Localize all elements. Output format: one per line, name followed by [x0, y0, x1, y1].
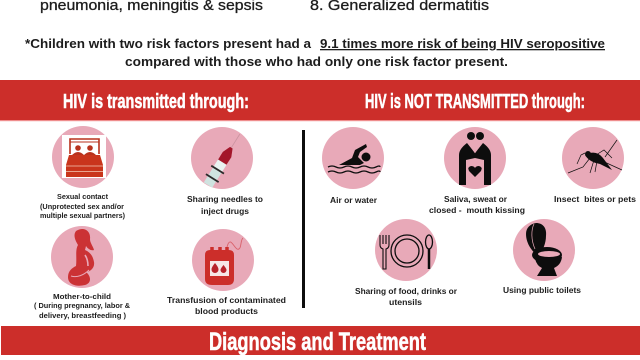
risk note text block: 9.1 times more risk of being HIV seropositive: [320, 36, 605, 51]
risk note text block: [25, 36, 605, 69]
icon: blood bag: [192, 229, 254, 291]
icon: pregnant mother: [51, 226, 113, 288]
label: saliva sweat kissing: closed - mouth kissing: [429, 205, 525, 215]
label: transfusion: [167, 295, 286, 316]
label: saliva sweat kissing: [429, 194, 525, 215]
icon: plate and cutlery: [375, 219, 437, 281]
risk factor list continuation: [40, 0, 489, 14]
risk note text block: compared with those who had only one risk factor present.: [125, 54, 508, 69]
label: sexual contact: multiple sexual partners): [40, 213, 125, 220]
icon: syringe: [191, 127, 253, 189]
label: sharing needles: Sharing needles to: [187, 194, 263, 204]
label: mother to child: ( During pregnancy, labor &: [34, 303, 130, 310]
label: sharing needles: inject drugs: [201, 206, 249, 216]
red banner: transmission headings: [0, 80, 640, 121]
icon: mosquito: [562, 127, 624, 189]
label: sharing food: utensils: [389, 297, 422, 307]
panel: not transmitted through: [322, 127, 636, 307]
label: mother to child: Mother-to-child: [53, 294, 111, 301]
label: transfusion: Transfusion of contaminated: [167, 295, 286, 305]
label: public toilets: Using public toilets: [503, 285, 581, 295]
icon: swimmer: [322, 127, 384, 189]
label: sexual contact: Sexual contact: [57, 194, 109, 201]
label: insect bites: Insect bites or pets: [554, 194, 636, 204]
label: sexual contact: (Unprotected sex and/or: [40, 204, 124, 211]
icon: closed mouth kissing: [444, 127, 506, 189]
label: sharing food: Sharing of food, drinks or: [355, 286, 458, 296]
icon: sexual contact bed: [52, 126, 114, 188]
label: mother to child: [34, 294, 130, 320]
label: mother to child: delivery, breastfeeding ): [39, 313, 126, 320]
icon: toilet: [513, 219, 575, 281]
label: sharing needles: [187, 194, 263, 216]
risk note text block: *Children with two risk factors present had a: [25, 36, 312, 51]
red banner: diagnosis and treatment: [1, 326, 640, 356]
vertical divider: [302, 130, 305, 308]
red banner: diagnosis and treatment: Diagnosis and Treatment: [209, 328, 426, 356]
red banner: transmission headings: HIV is transmitted through:: [63, 91, 249, 113]
label: sexual contact: [40, 194, 125, 220]
label: sharing food: [355, 286, 458, 307]
label: transfusion: blood products: [195, 306, 258, 316]
label: saliva sweat kissing: Saliva, sweat or: [444, 194, 508, 204]
panel: transmitted through: [34, 126, 286, 320]
label: air or water: Air or water: [330, 195, 378, 205]
